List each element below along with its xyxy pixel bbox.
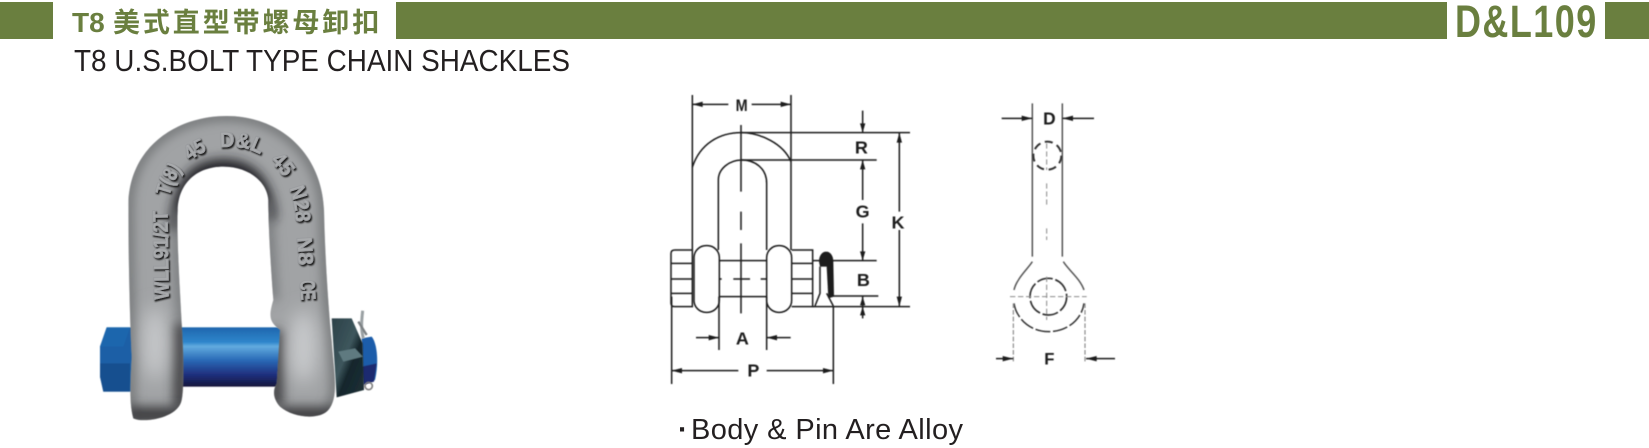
centre lines [1010, 143, 1087, 320]
hex nut and cotter pin [332, 311, 372, 397]
title: Chinese product name: 美式直型带螺母卸扣 [113, 8, 382, 38]
embossed markings: 45 [186, 138, 208, 161]
dimension F [996, 303, 1115, 369]
embossed markings: WLL91/2T [152, 210, 172, 303]
shackle body [123, 110, 343, 427]
dimension D: D [1043, 109, 1056, 129]
dimension P: P [747, 361, 759, 381]
dimension R: R [855, 137, 868, 157]
dimension R [741, 111, 910, 157]
shackle outline [671, 95, 813, 313]
embossed markings [152, 133, 318, 303]
dimension D [1002, 109, 1094, 129]
material note: Body & Pin Are Alloy [691, 414, 964, 446]
embossed markings: T(8) [155, 164, 186, 196]
dimension G: G [856, 202, 870, 222]
material note: · [678, 414, 688, 446]
header bar: right block [1605, 2, 1649, 39]
side view outline [1014, 103, 1084, 332]
blue pin [100, 327, 377, 392]
dimension A [696, 297, 791, 350]
dimension B: B [857, 270, 870, 290]
front view technical drawing [671, 95, 910, 384]
title: Chinese product name: T8 [72, 7, 105, 38]
dimension K: K [891, 212, 904, 232]
cotter pin [815, 252, 834, 306]
shackle product illustration [99, 115, 378, 421]
embossed markings: N28 [290, 184, 313, 224]
embossed markings: CE [300, 281, 318, 303]
dimension G [742, 160, 877, 261]
dimension M: M [736, 96, 748, 115]
subtitle: English product name: T8 U.S.BOLT TYPE CHAIN SHACKLES [74, 43, 570, 78]
embossed markings: 45 [272, 155, 298, 178]
embossed markings: N8 [296, 238, 316, 268]
header bar: middle block [396, 2, 1447, 39]
dimension A: A [736, 329, 749, 349]
header bar: left block [0, 2, 53, 39]
dimension M [692, 96, 791, 115]
side view technical drawing [996, 103, 1115, 369]
dimension K [891, 133, 904, 307]
dimension F: F [1044, 350, 1054, 369]
dimension B [813, 270, 910, 318]
embossed markings: D&L [221, 133, 264, 157]
dimension P [672, 297, 833, 384]
